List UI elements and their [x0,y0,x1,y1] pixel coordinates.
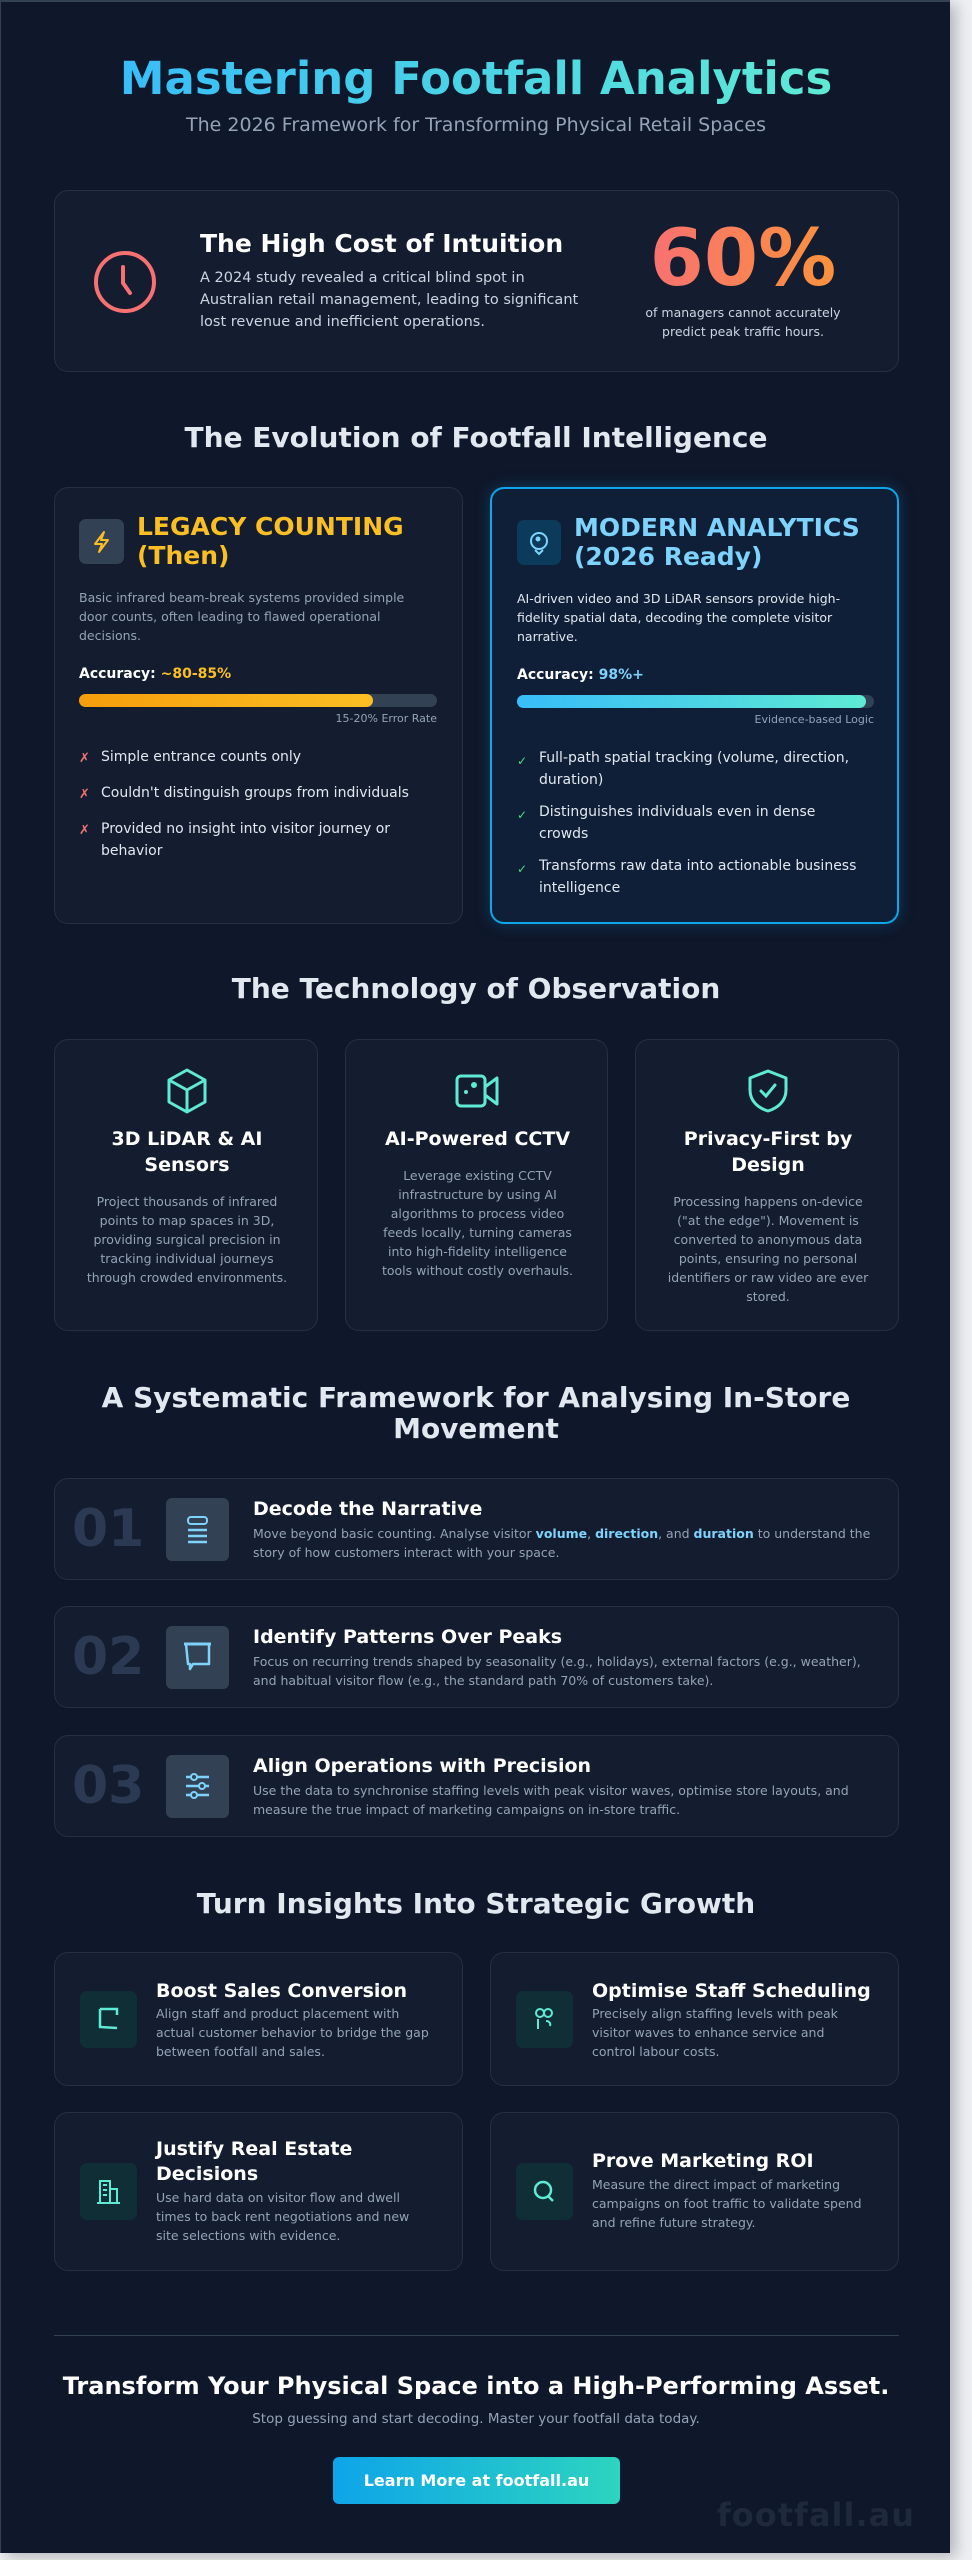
panel: legacy counting [54,487,463,924]
icon: cube [168,1068,206,1114]
panel: modern analytics: Evidence-based Logic [755,713,874,726]
description: Leverage existing CCTV infrastructure by using AI algorithms to process video feeds locally, turning cameras into high-fidelity intelligence tools without costly overhauls. [382,1168,573,1278]
title: AI-Powered CCTV [385,1128,570,1150]
heading: The High Cost of Intuition [200,229,563,258]
description: Basic infrared beam-break systems provided simple door counts, often leading to flawed operational decisions. [79,590,404,643]
stat: 60%: 60% [650,214,836,304]
heading: growth: Turn Insights Into Strategic Growth [197,1887,755,1920]
cta heading: Transform Your Physical Space into a High-Performing Asset. [63,2372,889,2400]
panel: legacy counting: 15-20% Error Rate [336,712,437,725]
title: Align Operations with Precision [253,1755,591,1777]
list: Distinguishes individuals even in dense crowds [539,804,815,842]
icon: video camera [456,1074,498,1108]
title: Prove Marketing ROI [592,2150,814,2172]
panel: boost sales [54,1952,463,2086]
panel: marketing roi [490,2112,899,2271]
icon: list [166,1498,229,1561]
accuracy: Accuracy: 98%+ [517,667,644,683]
bar [79,694,437,707]
title: Identify Patterns Over Peaks [253,1626,562,1648]
list: ✓ [517,754,527,768]
title: 3D LiDAR & AI Sensors [112,1128,262,1176]
step 02 [54,1606,899,1708]
list: ✓ [517,862,527,876]
heading: (Then) [137,541,229,570]
heading [574,513,860,571]
cta button [333,2457,620,2504]
list: Couldn't distinguish groups from individuals [101,785,409,801]
heading: technology: The Technology of Observation [232,972,720,1005]
step 01 [54,1478,899,1580]
list: Transforms raw data into actionable business intelligence [539,858,856,896]
description: Use the data to synchronise staffing levels with peak visitor waves, optimise store layouts, and measure the true impact of marketing campaigns on in-store traffic. [253,1783,849,1817]
panel: cctv [345,1039,608,1331]
description: Processing happens on-device ("at the edge"). Movement is converted to anonymous data points, ensuring no personal identifiers or raw video are ever stored. [668,1194,868,1304]
step 03 [54,1735,899,1837]
number: 02 [72,1627,144,1687]
description: Measure the direct impact of marketing campaigns on foot traffic to validate spend and refine future strategy. [592,2177,862,2230]
icon: building [80,2163,137,2220]
title: Decode the Narrative [253,1498,482,1520]
title: Privacy-First by Design [684,1128,852,1176]
panel: staff scheduling [490,1952,899,2086]
list [79,749,409,859]
title: Mastering Footfall Analytics [120,52,832,105]
watermark: footfall.au [717,2496,915,2534]
icon: magnifier [516,2163,573,2220]
heading: framework: A Systematic Framework for Analysing In-Store Movement [102,1381,850,1445]
description: Use hard data on visitor flow and dwell times to back rent negotiations and new site selections with evidence. [156,2190,409,2243]
bar [517,695,874,708]
title: Optimise Staff Scheduling [592,1980,871,2002]
panel: modern analytics [490,487,899,924]
icon: people [516,1991,573,2048]
icon: speech [166,1626,229,1689]
icon: cart [80,1991,137,2048]
panel: privacy [635,1039,899,1331]
list: ✓ [517,808,527,822]
description: Focus on recurring trends shaped by seasonality (e.g., holidays), external factors (e.g., weather), and habitual visitor flow (e.g., the standard path 70% of customers take). [253,1654,861,1688]
description: Move beyond basic counting. Analyse visitor volume, direction, and duration to understand the story of how customers interact with your space. [253,1526,870,1560]
heading [137,512,404,570]
heading: evolution: The Evolution of Footfall Intelligence [185,421,767,454]
title: Boost Sales Conversion [156,1980,407,2002]
number: 01 [72,1499,144,1559]
cta button: Learn More at footfall.au [364,2471,589,2490]
heading: (2026 Ready) [574,542,762,571]
icon: sliders [166,1755,229,1818]
title: Justify Real Estate Decisions [156,2138,352,2185]
panel: high cost of intuition [54,190,899,372]
stat caption: of managers cannot accurately predict peak traffic hours. [645,305,841,339]
heading: LEGACY COUNTING [137,512,404,541]
body text: A 2024 study revealed a critical blind spot in Australian retail management, leading to significant lost revenue and inefficient operations. [200,270,578,330]
list [517,750,856,896]
accuracy: Accuracy: ~80-85% [79,666,231,682]
description: AI-driven video and 3D LiDAR sensors provide high-fidelity spatial data, decoding the complete visitor narrative. [517,591,840,644]
icon: ai brain [517,520,561,565]
icon: shield [748,1070,788,1112]
list: ✗ [79,751,90,766]
list: Simple entrance counts only [101,749,301,765]
list: ✗ [79,787,90,802]
cta subtext: Stop guessing and start decoding. Master your footfall data today. [252,2411,700,2427]
description: Precisely align staffing levels with peak visitor waves to enhance service and control labour costs. [592,2006,838,2059]
icon: lightning [79,519,124,564]
list: ✗ [79,823,90,838]
description: Project thousands of infrared points to map spaces in 3D, providing surgical precision in tracking individual journeys through crowded environments. [87,1194,287,1285]
heading: MODERN ANALYTICS [574,513,860,542]
panel: lidar [54,1039,318,1331]
list: Provided no insight into visitor journey or behavior [101,821,390,859]
icon: clock [94,251,156,313]
number: 03 [72,1756,144,1816]
list: Full-path spatial tracking (volume, direction, duration) [539,750,849,788]
panel: real estate [54,2112,463,2271]
subtitle: The 2026 Framework for Transforming Physical Retail Spaces [186,114,766,136]
description: Align staff and product placement with actual customer behavior to bridge the gap between footfall and sales. [156,2006,429,2059]
